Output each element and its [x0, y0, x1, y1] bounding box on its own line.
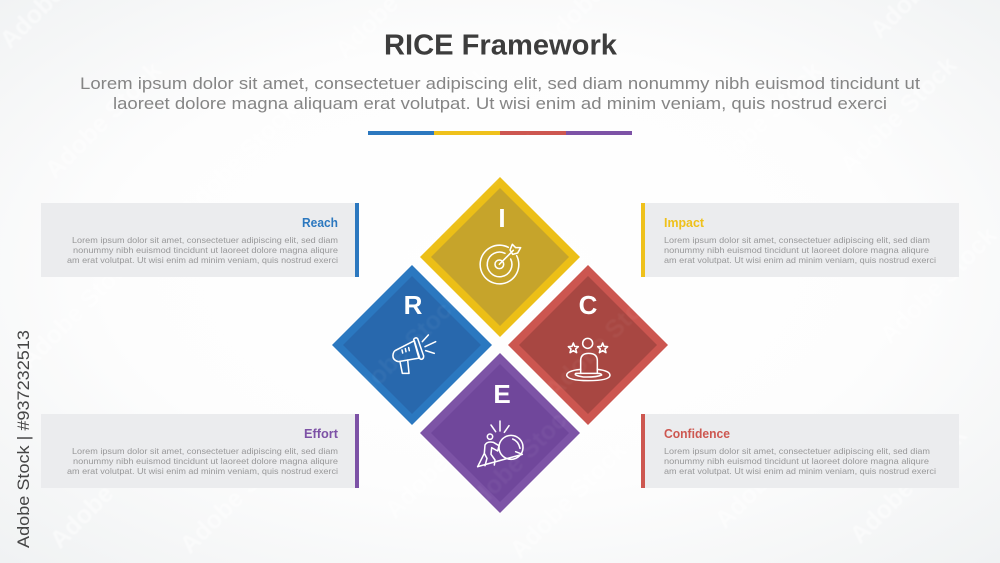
infographic canvas: Adobe Stock [379, 396, 507, 524]
subtitle text: laoreet dolore magna aliquam erat volutpat. Ut wisi enim ad minim veniam, quis nostrud exerci [113, 94, 887, 113]
panel: Reach: am erat volutpat. Ut wisi enim ad minim veniam, quis nostrud exerci [67, 255, 338, 265]
subtitle text [80, 74, 920, 113]
infographic canvas: Adobe Stock [174, 96, 302, 224]
panel: Reach: nonummy nibh euismod tincidunt ut laoreet dolore magna aliqure [73, 245, 338, 255]
subtitle text: Lorem ipsum dolor sit amet, consectetuer adipiscing elit, sed diam nonummy nibh euismod tincidunt ut [80, 74, 920, 93]
diamond: C Confidence: C [579, 290, 598, 320]
infographic canvas: Adobe Stock [709, 406, 837, 534]
infographic canvas: Adobe Stock [44, 426, 172, 554]
diamond: R Reach [332, 265, 492, 425]
diamond: C Confidence [508, 265, 668, 425]
panel: Confidence [641, 414, 959, 488]
diagram watermark overlay: Adobe Stock [454, 396, 582, 524]
panel: Effort: Effort [304, 427, 339, 441]
infographic canvas: Adobe Stock [39, 56, 167, 184]
diamond: R Reach: R [404, 290, 423, 320]
icon: target with arrow [480, 244, 521, 284]
panel: Confidence: Confidence [664, 427, 730, 441]
panel: Effort: am erat volutpat. Ut wisi enim ad minim veniam, quis nostrud exerci [67, 466, 338, 476]
infographic canvas: Adobe Stock [844, 421, 972, 549]
panel: Reach [41, 203, 359, 277]
infographic canvas: Adobe Stock [369, 61, 497, 189]
infographic canvas: Adobe Stock [504, 436, 632, 563]
panel: Reach: Lorem ipsum dolor sit amet, consectetuer adipiscing elit, sed diam [72, 235, 338, 245]
infographic canvas: Adobe Stock [669, 226, 797, 354]
infographic canvas: Adobe Stock [834, 51, 962, 179]
panel: Confidence: am erat volutpat. Ut wisi enim ad minim veniam, quis nostrud exerci [664, 466, 936, 476]
infographic canvas: Adobe Stock [874, 221, 1000, 349]
panel: Impact: nonummy nibh euismod tincidunt ut laoreet dolore magna aliqure [664, 245, 929, 255]
colour divider bar [368, 131, 632, 135]
panel: Impact: am erat volutpat. Ut wisi enim ad minim veniam, quis nostrud exerci [664, 255, 936, 265]
panel: Effort: nonummy nibh euismod tincidunt ut laoreet dolore magna aliqure [73, 456, 338, 466]
side credit text: Adobe Stock | #937232513 [14, 330, 33, 548]
infographic canvas: Adobe Stock [174, 431, 302, 559]
diagram watermark overlay: Adobe Stock [339, 286, 467, 414]
panel: Impact: Lorem ipsum dolor sit amet, consectetuer adipiscing elit, sed diam [664, 235, 930, 245]
infographic canvas: Adobe Stock [209, 226, 337, 354]
diamond: E Effort [420, 353, 580, 513]
icon: megaphone [393, 335, 436, 373]
diagram watermark overlay: Adobe Stock [414, 126, 542, 254]
icon: person pushing boulder [478, 421, 523, 467]
icon: person with stars [567, 338, 610, 381]
title: RICE Framework [384, 30, 618, 62]
panel: Impact: Impact [664, 216, 705, 230]
diamond: I Impact: I [498, 203, 506, 233]
diagram watermark overlay [339, 126, 667, 524]
panel: Confidence: nonummy nibh euismod tincidunt ut laoreet dolore magna aliqure [664, 456, 929, 466]
diamond: I Impact [420, 177, 580, 337]
panel: Effort: Lorem ipsum dolor sit amet, consectetuer adipiscing elit, sed diam [72, 446, 338, 456]
panel: Confidence: Lorem ipsum dolor sit amet, consectetuer adipiscing elit, sed diam [664, 446, 930, 456]
panel: Effort [41, 414, 359, 488]
infographic canvas: Adobe Stock [699, 56, 827, 184]
diamond: E Effort: E [493, 379, 511, 409]
panel: Reach: Reach [302, 216, 338, 230]
diagram watermark overlay: Adobe Stock [539, 276, 667, 404]
panel: Impact [641, 203, 959, 277]
infographic canvas: Adobe Stock [14, 246, 142, 374]
